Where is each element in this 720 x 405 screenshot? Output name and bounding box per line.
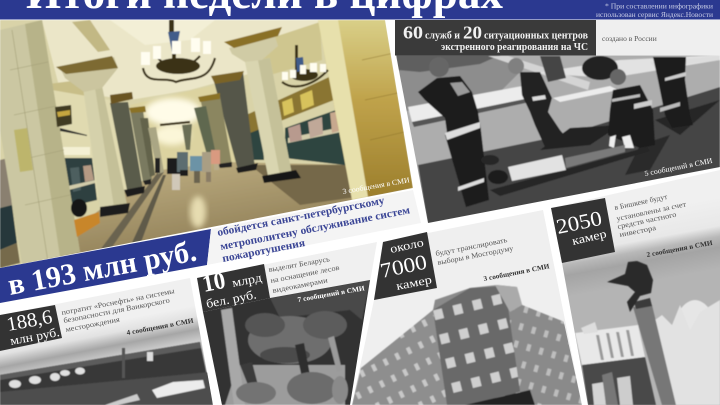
photo: Avtovo metro station <box>0 20 413 268</box>
description <box>435 235 514 267</box>
mention count: 3 сообщения в СМИ <box>483 262 551 283</box>
description <box>614 192 688 239</box>
heading text: ситуационных центров <box>484 30 589 42</box>
right column <box>338 20 413 196</box>
description text: метрополитену обслуживание систем <box>219 204 412 253</box>
description: месторождения <box>65 315 121 334</box>
ground <box>418 87 720 225</box>
front columns <box>83 90 114 207</box>
callout: 193 million roubles <box>0 190 421 303</box>
figure text: 188,6 <box>5 306 54 336</box>
description text: пожаротушения <box>221 237 306 265</box>
figure text: 2050 <box>554 206 604 239</box>
heading text: экстренного реагирования на ЧС <box>441 42 588 53</box>
figure text <box>554 206 608 248</box>
figure text: камер <box>395 272 433 293</box>
description: безопасности для Ванкорского <box>63 295 171 325</box>
rescuer left <box>418 76 489 207</box>
description: в Бишкеке будут <box>614 192 669 212</box>
figure text: 10 <box>200 268 228 298</box>
right-hand train <box>284 110 346 166</box>
figure box <box>0 305 62 351</box>
panel: Mosgorduma election cameras <box>352 210 582 405</box>
description: будут транслировать <box>435 235 509 258</box>
figure text <box>5 306 61 348</box>
passengers <box>155 150 220 190</box>
blue figure band <box>0 229 211 303</box>
mosaic columns <box>110 102 143 190</box>
bench and sitter <box>74 212 100 237</box>
text backing and sky <box>551 170 720 405</box>
figure text: бел. руб. <box>205 287 258 311</box>
source note: * При составлении инфографики <box>605 2 713 10</box>
description: на оснащение лесов <box>270 263 341 285</box>
heading text: 60 <box>403 22 423 42</box>
figure text: камер <box>571 226 608 248</box>
side panel <box>596 20 720 56</box>
panel: emergency services <box>395 20 720 225</box>
source note: использован сервис Яндекс.Новости <box>596 10 713 19</box>
chandeliers <box>143 56 328 125</box>
figure box <box>374 232 437 300</box>
figure text <box>200 268 264 311</box>
source note <box>596 2 713 19</box>
description: инвестора <box>619 223 657 239</box>
side panel text: создано в России <box>602 34 657 43</box>
description <box>61 286 175 334</box>
photo: Vankor field <box>0 342 213 405</box>
sign <box>55 105 72 127</box>
mention count: 5 сообщений в СМИ <box>644 156 714 178</box>
photo: office building <box>352 285 582 405</box>
figure text: около <box>389 235 425 256</box>
description text <box>216 195 412 265</box>
rescuer centre <box>520 72 565 147</box>
panel: Belarus forest cameras <box>197 242 377 405</box>
figure box <box>197 264 270 312</box>
description: средств частного <box>617 210 677 231</box>
description text: обойдется санкт-петербургскому <box>216 195 386 239</box>
left trains <box>63 158 97 207</box>
rescuer right <box>653 57 693 128</box>
figure box <box>551 198 615 263</box>
horseman statue <box>607 261 653 312</box>
description: видеокамерами <box>272 275 328 295</box>
heading text <box>403 22 589 53</box>
figure text: 7000 <box>378 250 429 283</box>
description: установлены за счет <box>616 199 688 223</box>
panel: Rosneft security <box>0 278 213 405</box>
metro photo mention count: 3 сообщения в СМИ <box>342 175 411 196</box>
mention count: 2 сообщения в СМИ <box>646 239 714 259</box>
victim on stretcher <box>490 150 638 196</box>
text backing <box>197 242 377 314</box>
floor <box>49 162 408 258</box>
text and sky backing <box>352 210 582 405</box>
mention count: 7 сообщений в СМИ <box>297 284 366 304</box>
heading block <box>395 20 596 56</box>
panel: Bishkek cameras <box>551 170 720 405</box>
header band <box>0 0 720 20</box>
mention count: 4 сообщения в СМИ <box>126 317 195 337</box>
photo: Manas monument <box>575 261 720 405</box>
description: потратит «Роснефть» на системы <box>61 286 175 317</box>
photo: rescuers with stretcher <box>396 55 720 225</box>
heading text: 20 <box>463 22 482 42</box>
figure text: в 193 млн руб. <box>5 235 199 302</box>
text backing and sky <box>0 278 213 405</box>
figure text <box>378 235 433 293</box>
description: выборы в Мосгордуму <box>437 243 514 267</box>
figure text: млн руб. <box>9 325 61 348</box>
white description panel <box>207 190 421 265</box>
heading text: служб и <box>425 30 460 42</box>
photo: forest and bison <box>200 278 375 405</box>
description <box>268 254 341 295</box>
description: выделит Беларусь <box>268 254 331 274</box>
gold wall panels <box>248 77 334 134</box>
rescuer kneeling <box>608 85 655 148</box>
figure text: млрд <box>231 270 264 290</box>
